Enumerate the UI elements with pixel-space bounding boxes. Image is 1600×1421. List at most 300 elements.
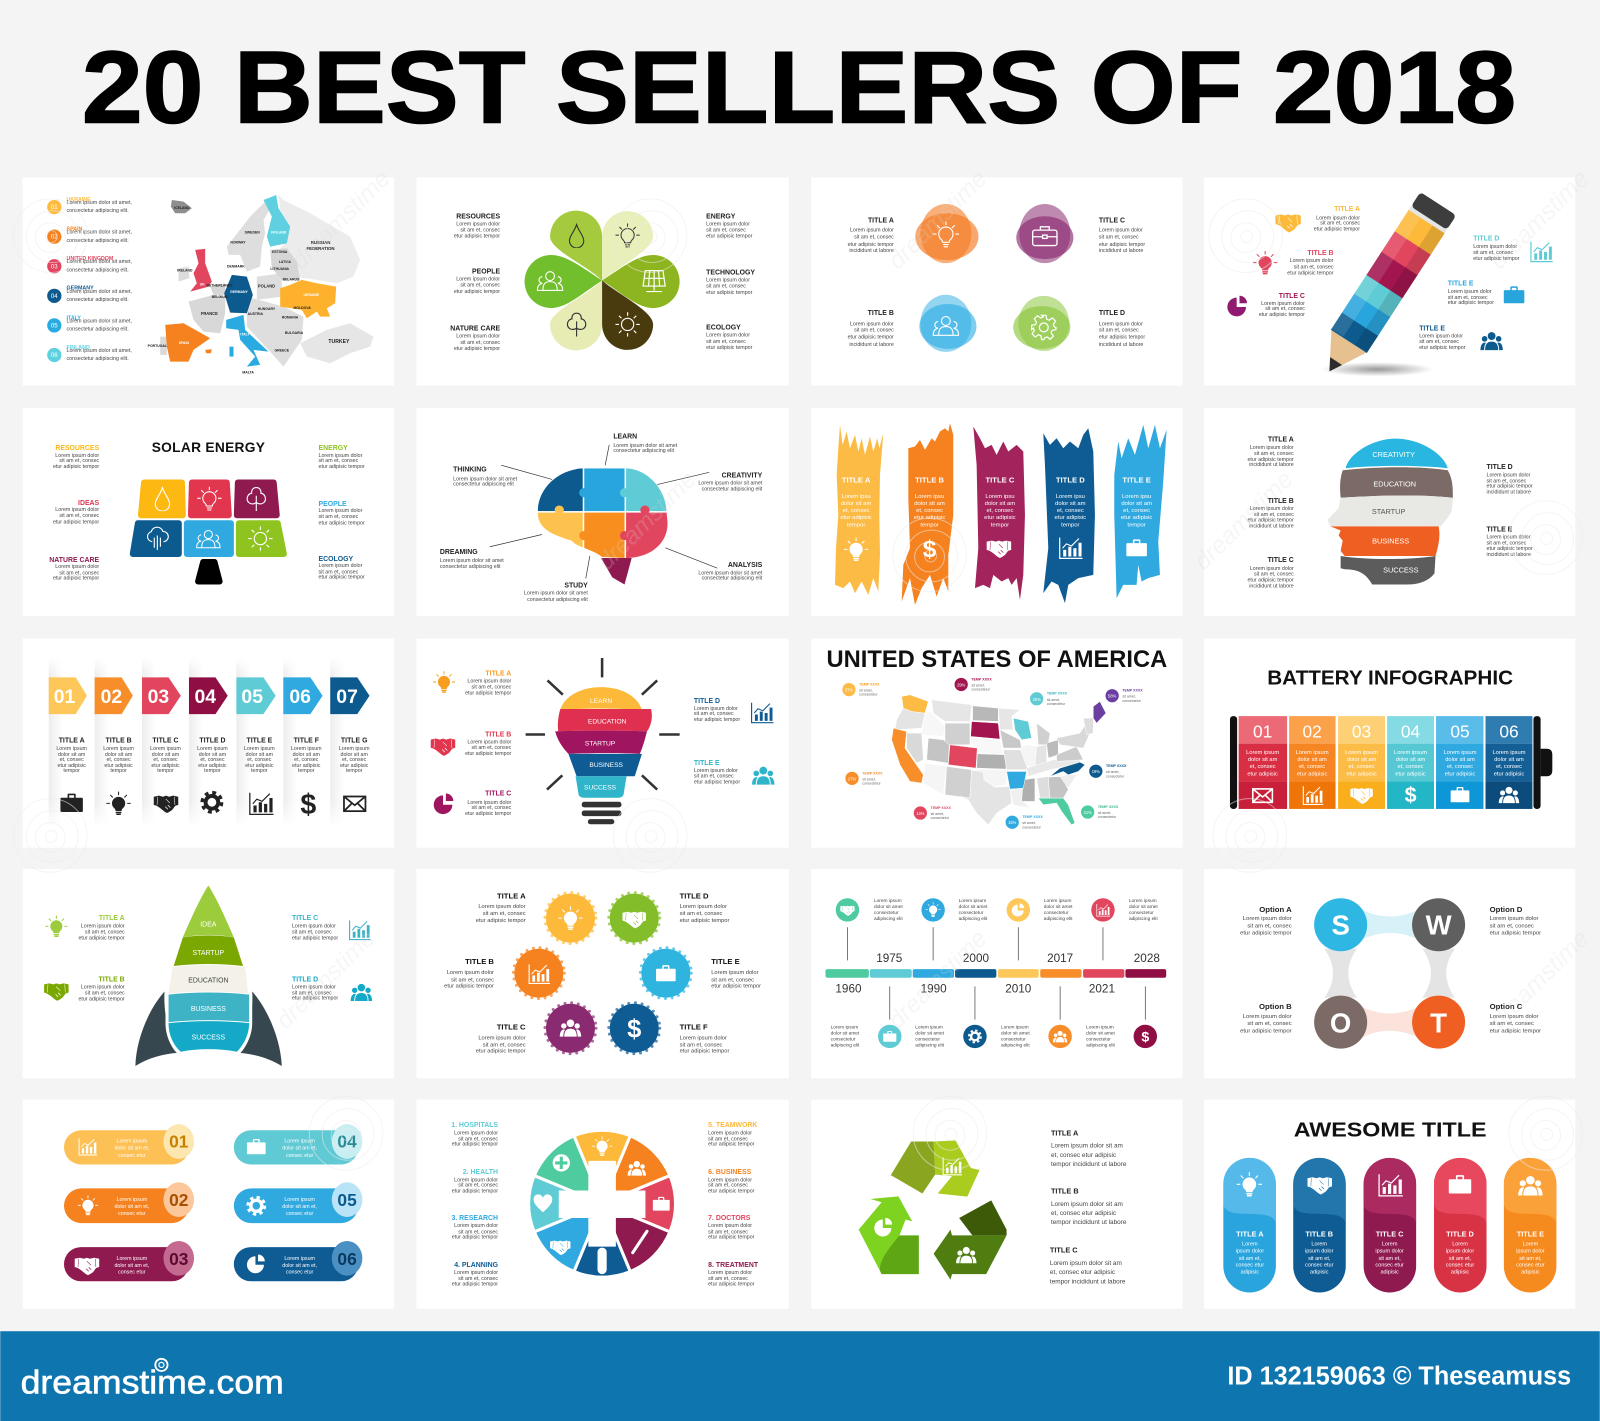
text: resources: etur adipisic tempor [454,234,500,240]
pill: title A: sit am et, [1239,1256,1261,1262]
icon: envelope [344,796,365,811]
callout: navy: 19% [1092,769,1100,774]
map labels: LITHUANIA [270,267,290,271]
text: study: Lorem ipsum dolor sit amet [524,591,588,597]
text: thinking: THINKING [453,466,487,473]
callout: navy: sit amet, [1106,770,1120,774]
text: doctors: Lorem ipsum dolor [708,1223,752,1229]
text: top blocks: adipiscing elit [1044,916,1073,922]
callout: maroon: TEMP XXXX [971,677,992,681]
text: title A: Lorem ipsum dolor [850,228,894,234]
text: energy: etur adipisic tempor [706,234,753,240]
circle: W: W [1426,909,1452,940]
map: Europe [160,195,373,367]
list item 04: consectetur adipiscing elit. [67,297,129,303]
text: energy: sit am et, consec [319,458,359,464]
text: title B: incididunt ut labore [849,342,894,348]
text: people: PEOPLE [319,501,347,508]
text: planning: 4. PLANNING [454,1262,498,1269]
text: doctors: etur adipisic tempor [708,1234,755,1240]
map labels: BULGARIA [285,331,304,335]
text: title F: TITLE F [294,738,319,745]
text: title D: etur adipisic tempor [1487,484,1533,490]
text: nature care: NATURE CARE [49,557,100,564]
text: title D: TITLE D [680,892,709,901]
icon: bulb [615,223,640,247]
cell 03: dolor sit am [1347,757,1377,763]
text: ecology: etur adipisic tempor [706,345,753,351]
cell 03: 03 [1352,722,1371,742]
tab 06: 06 [289,686,311,708]
text: people: PEOPLE [472,268,500,275]
text: research: etur adipisic tempor [452,1234,498,1240]
text: title E second: etur adipisic tempor [1419,345,1466,351]
brushes [835,423,1167,605]
callout: yellow: 37% [845,688,853,693]
text: teamwork: etur adipisic tempor [708,1142,755,1148]
icon: thermometer [633,1231,647,1253]
pill 06: 06 [337,1249,357,1269]
text: nature care: NATURE CARE [450,326,500,333]
text: title D: Lorem ipsum dolor [1099,321,1143,327]
text: bottom blocks: dolor sit amet [1001,1030,1030,1036]
text: ideas: etur adipisic tempor [53,519,99,525]
text: title D: tempor [1061,522,1080,528]
list item 03: 03 [51,263,58,270]
text: title C: sit am et, consec [1254,571,1294,577]
label: success: SUCCESS [192,1034,225,1041]
pill: title C: adipisic [1380,1270,1399,1276]
list item 01: Lorem ipsum dolor sit amet, [67,200,132,206]
tab 05 [236,677,276,714]
map labels: DENMARK [227,264,245,268]
text: title D: sit am et, consec [1473,250,1513,256]
text: title A: et, consec etur adipisic [1051,1152,1117,1159]
text: title D: TITLE D [1099,310,1125,317]
text: title D: Lorem ipsum dolor [1473,244,1517,250]
panel: pencil [1204,177,1575,386]
text: option B: etur adipisic tempor [1240,1028,1292,1034]
text: treatment: 8. TREATMENT [708,1262,759,1269]
text: title B: Lorem ipsum dolor [81,984,125,990]
text: title B: Lorem ipsum dolor [447,970,494,976]
chart: solar panel tiles [133,483,284,581]
cell 02: 02 [1302,722,1322,742]
text: title B: tempor [920,522,939,528]
text: title E: TITLE E [694,760,720,767]
text: title A: TITLE A [59,738,85,745]
text: title C: TITLE C [152,738,179,745]
text: health: Lorem ipsum dolor [454,1177,498,1183]
icon: chart [349,920,371,940]
text: title C: dolor sit am [985,501,1015,507]
years below bar: 2021 [1089,983,1115,996]
callout: yellow: consectetur [859,693,878,697]
chart: head layers [1327,439,1453,585]
pill: title A: Lorem [1242,1242,1258,1248]
text: top blocks: consectetur [1129,910,1154,916]
label: business: BUSINESS [191,1006,226,1013]
callout: blue [1006,815,1043,829]
pill: title A: consec etur [1236,1262,1264,1268]
text: option A: etur adipisic tempor [1240,930,1292,936]
chart: eight segment ring [529,1130,676,1277]
text: option A: sit am et, consec [1247,923,1292,929]
arrows [490,445,717,578]
text: title D: et, consec [200,757,225,763]
text: nature care: Lorem ipsum dolor [456,334,500,340]
map labels: MALTA [242,370,254,374]
text: title B: etur adipisic tempor [1247,517,1294,523]
text: energy: ENERGY [706,213,736,220]
cell 04: $ [1405,783,1417,807]
text: analysis: consectetur adipiscing elit [702,575,763,581]
text: title D: Lorem ipsum dolor [680,904,727,910]
tab 04 [189,677,228,714]
text: technology: TECHNOLOGY [706,269,755,276]
text: title C: et, consec [986,508,1013,514]
text: title A: etur adipisic tempor [465,691,512,697]
cell 04: etur adipisic [1395,771,1426,777]
map labels: AUSTRIA [248,312,263,316]
text: title B: etur adipisic tempor [848,335,894,341]
pill: title C: consec etur [1375,1262,1404,1268]
text: title B: TITLE B [1307,250,1334,257]
text: energy: etur adipisic tempor [319,464,365,470]
icon: handshake [431,739,455,756]
text: title E: etur adipisic [245,763,274,769]
text: title E: et, consec [247,757,272,763]
text: treatment: etur adipisic tempor [708,1281,755,1287]
icon: sun [615,312,640,337]
panel: scalloped badges [416,869,789,1078]
text: title B: TITLE B [485,732,511,739]
map labels: IRELAND [177,268,193,272]
cell 02 [1289,716,1336,809]
text: title D: TITLE D [694,698,720,705]
text: title B: Lorem ipsum dolor [1250,506,1294,512]
text: ideas: Lorem ipsum dolor [55,507,99,513]
text: title C: et, consec [153,757,178,763]
text: title A: et, consec [60,757,84,763]
text: title C: sit am et, consec [292,929,332,935]
text: title E: Lorem ipsum dolor [711,970,759,976]
text: title C: sit am et, consec [1099,235,1139,241]
arrow: top [891,1140,980,1197]
circle: W [1412,898,1465,951]
text: title A: TITLE A [868,217,894,224]
panel: watercolor blobs [811,177,1183,386]
panel: solar energy [23,408,394,616]
list item 05: consectetur adipiscing elit. [67,327,129,333]
text: title E: etur adipisic [1121,515,1152,521]
text: title A: etur adipisic [58,763,86,769]
text: ecology: sit am et, consec [706,339,746,345]
text: planning: sit am et, consec [458,1276,498,1282]
text: top blocks: dolor sit amet [959,904,988,910]
callout: orange: TEMP XXXX [862,771,883,775]
cell 02: dolor sit am [1297,757,1327,763]
text: title B: et, consec etur adipisic [1051,1210,1117,1217]
map labels: RUSSIAN [311,240,330,245]
text: title F: tempor [298,768,315,774]
text: option C: Option C [1490,1002,1523,1011]
text: hospitals: 1. HOSPITALS [451,1122,498,1129]
pill 01: 01 [169,1132,189,1152]
callout: maroon: 29% [957,683,966,688]
callout: navy [1089,764,1127,778]
text: title B: tempor [110,768,127,774]
pill 05 [234,1182,362,1223]
list item 02: Lorem ipsum dolor sit amet, [67,230,132,236]
list item 03 [47,256,132,273]
label: business: BUSINESS [589,762,624,769]
pill: title D: TITLE D [1446,1229,1474,1238]
list item 06: FINLAND [67,345,90,351]
pill 06: dolor sit am et, [282,1263,317,1269]
circle: T [1412,996,1465,1049]
text: health: etur adipisic tempor [452,1188,498,1194]
callout: orange: consectetur [862,781,881,785]
text: planning: etur adipisic tempor [452,1281,498,1287]
text: title B: Lorem ipsum dolor [850,321,894,327]
text: creativity: CREATIVITY [722,472,763,479]
text: resources: sit am et, consec [460,228,500,234]
callout: green [1081,805,1119,819]
list item 03: Lorem ipsum dolor sit amet, [67,259,132,265]
text: title C: tempor [991,522,1009,528]
text: title D: etur adipisic [1055,515,1086,521]
text: title G: TITLE G [341,738,367,745]
tab 04: 04 [195,686,216,708]
text: title E second: Lorem ipsum dolor [1419,334,1463,340]
text: title D: incididunt ut labore [1487,490,1531,496]
text: top blocks: Lorem ipsum [1044,898,1071,904]
cell 04: et, consec [1398,764,1424,770]
text: option D: Option D [1490,905,1523,914]
text: top blocks: dolor sit amet [1044,904,1073,910]
text: title A: TITLE A [497,892,526,901]
pill: title A: ipsum dolor [1236,1249,1264,1255]
text: top blocks: Lorem ipsum [874,898,902,904]
text: title C: incididunt ut labore [1249,584,1294,590]
icon: chart [249,793,274,815]
rocket fins [135,992,282,1066]
text: option C: sit am et, consec [1490,1021,1534,1027]
text: bottom blocks: Lorem ipsum [1086,1024,1114,1030]
text: people: etur adipisic tempor [454,289,500,295]
list item 02: 02 [51,234,58,241]
icon: dollar: $ [923,536,937,563]
text: health: 2. HEALTH [463,1169,498,1176]
text: title B: Lorem ipsum dolor [467,740,512,746]
text: bottom blocks: consectetur [915,1037,940,1043]
icon: pie [1227,296,1247,316]
map labels: GREECE [274,348,290,352]
text: title A: et, consec [843,508,870,514]
text: technology: sit am et, consec [706,284,746,290]
icon: red chart [1091,898,1115,922]
cell 03 [1338,716,1385,809]
tab 01 [49,677,87,714]
cell 06: Lorem ipsum [1492,750,1526,756]
pill: title E [1504,1158,1556,1292]
map labels: TURKEY [328,339,350,345]
heading: AWESOME TITLE [1294,1119,1487,1141]
callout: yellow: TEMP XXXX [859,683,880,687]
pill: title C: sit am et, [1378,1256,1401,1262]
icon: gear [202,793,222,812]
text: learn: Lorem ipsum dolor sit amet [613,443,678,449]
list item 06 [47,345,132,362]
circle: S: S [1331,909,1350,940]
text: title E: tempor [1127,522,1146,528]
text: research: Lorem ipsum dolor [454,1223,498,1229]
callout: green: consectetur [1098,815,1117,819]
text: title D: etur adipisic tempor [680,918,729,924]
text: top blocks: adipiscing elit [959,916,988,922]
list item 02 [47,227,132,244]
text: title E: etur adipisic tempor [711,983,761,989]
cell 01: et, consec [1250,764,1276,770]
text: ecology: sit am et, consec [319,569,359,575]
label: creativity: CREATIVITY [1372,450,1415,459]
badge: green handshake [609,893,660,944]
tab 03: 03 [148,686,169,708]
text: title A: Lorem ipsum dolor sit am [1051,1143,1123,1150]
circle: O [1314,996,1367,1049]
text: title G: dolor sit am [341,752,368,758]
panel: light bulb [416,639,789,848]
text: option A: Option A [1259,905,1292,914]
icon: handshake [44,983,69,1001]
tab 02: 02 [101,686,122,708]
text: analysis: Lorem ipsum dolor sit amet [698,570,763,576]
text: title A: Lorem ipsum dolor [467,678,512,684]
text: study: consectetur adipiscing elit [527,597,588,603]
text: title D: tempor [204,768,221,774]
text: title E: Lorem ipsu [1122,494,1151,500]
text: title C: TITLE C [986,476,1015,485]
list item 04: Lorem ipsum dolor sit amet, [67,289,132,295]
text: title E: sit am et, consec [1448,295,1488,301]
pill 06: Lorem ipsum [284,1256,316,1262]
pill: title D: adipisic [1451,1270,1469,1276]
text: title C: TITLE C [1279,293,1305,300]
text: title A: sit am et, consec [85,929,125,935]
map labels on coloured countries: GERMANY [230,290,248,294]
text: title A: Lorem ipsum dolor [81,923,125,929]
icon: heart [534,1194,552,1212]
text: option B: sit am et, consec [1247,1021,1292,1027]
text: energy: sit am et, consec [706,228,746,234]
text: title E: sit am et, consec [1487,541,1527,547]
text: title G: etur adipisic [340,763,369,769]
text: business: 6. BUSINESS [708,1169,752,1176]
text: title C: Lorem ipsum dolor [1250,566,1294,572]
text: title B: etur adipisic [914,515,945,521]
text: title A: TITLE A [1051,1128,1079,1137]
pill: title B: sit am et, [1308,1256,1331,1262]
text: title A: TITLE A [1334,206,1360,213]
text: resources: etur adipisic tempor [53,464,99,470]
text: bottom blocks: adipiscing elit [1001,1043,1030,1049]
text: title E: Lorem ipsum dolor [1448,289,1492,295]
text: title C: Lorem ipsum dolor [1261,301,1305,307]
text: title A: sit am et, consec [472,685,512,691]
pill: title E: ipsum dolor [1516,1249,1545,1255]
list item 05: ITALY [67,315,81,321]
text: top blocks: consectetur [1044,910,1069,916]
icon: briefcase [653,1197,670,1211]
map labels: NETHERLANDS [207,284,233,288]
pill 03: 03 [169,1249,189,1269]
text: resources: sit am et, consec [59,458,100,464]
panel: timeline [811,869,1183,1078]
years above bar: 2028 [1134,952,1160,965]
text: hospitals: Lorem ipsum dolor [454,1130,498,1136]
text: title E: TITLE E [1448,281,1474,288]
text: title E: dolor sit am [1121,501,1152,507]
callout: red: TEMP XXXX [931,806,952,810]
list item 06: 06 [51,352,58,359]
pill: title E: adipisic [1521,1270,1540,1276]
text: title E: Lorem ipsum dolor [1487,535,1531,541]
text: title B: TITLE B [99,976,125,983]
text: title A: sit am et, consec [854,235,894,241]
text: people: etur adipisic tempor [319,520,365,526]
text: title D: TITLE D [199,738,226,745]
text: title F: et, consec [294,757,319,763]
text: title C: Lorem ipsum dolor [1099,228,1143,234]
text: title D: etur adipisic tempor [1473,256,1520,262]
text: dreamstime [286,165,396,275]
icon: navy gear [963,1025,987,1048]
cell 04: 04 [1401,722,1421,742]
cell 04: Lorem ipsum [1394,750,1427,756]
text: treatment: Lorem ipsum dolor [708,1270,752,1276]
text: resources: Lorem ipsum dolor [55,453,99,459]
icon: bulb [433,671,455,693]
icon: people [351,984,372,1001]
text: people: sit am et, consec [460,283,500,289]
callout: blue: consectetur [1022,825,1042,829]
text: dreaming: consectetur adipiscing elit [440,564,501,570]
text: title C: Lorem ipsum [150,746,181,752]
text: title A: Lorem ipsum [56,746,88,752]
text: title B: etur adipisic tempor [78,997,125,1003]
chart: pencil bands [1311,192,1456,383]
icon: people [197,530,220,548]
text: title E second: sit am et, consec [1419,339,1459,345]
text: title B: TITLE B [915,476,944,485]
pill 01: Lorem ipsum [117,1139,148,1145]
text: title C: etur adipisic tempor [476,1049,526,1055]
footer band [0,1331,1600,1421]
callout: navy: consectetur [1106,774,1125,778]
text: ecology: ECOLOGY [319,556,354,563]
badge: navy dollar: $ [627,1015,641,1043]
panel: battery [1204,639,1575,848]
text: title D: etur adipisic tempor [292,996,338,1002]
icon: bulb [844,538,868,561]
chart: six petal clover [525,211,680,350]
pill: title B: TITLE B [1305,1229,1333,1238]
callout: blue: sit amet, [1022,821,1036,825]
text: title E: etur adipisic tempor [1448,300,1494,306]
text: title E: TITLE E [711,957,740,966]
callout: cyan: sit amet, [1047,698,1060,702]
